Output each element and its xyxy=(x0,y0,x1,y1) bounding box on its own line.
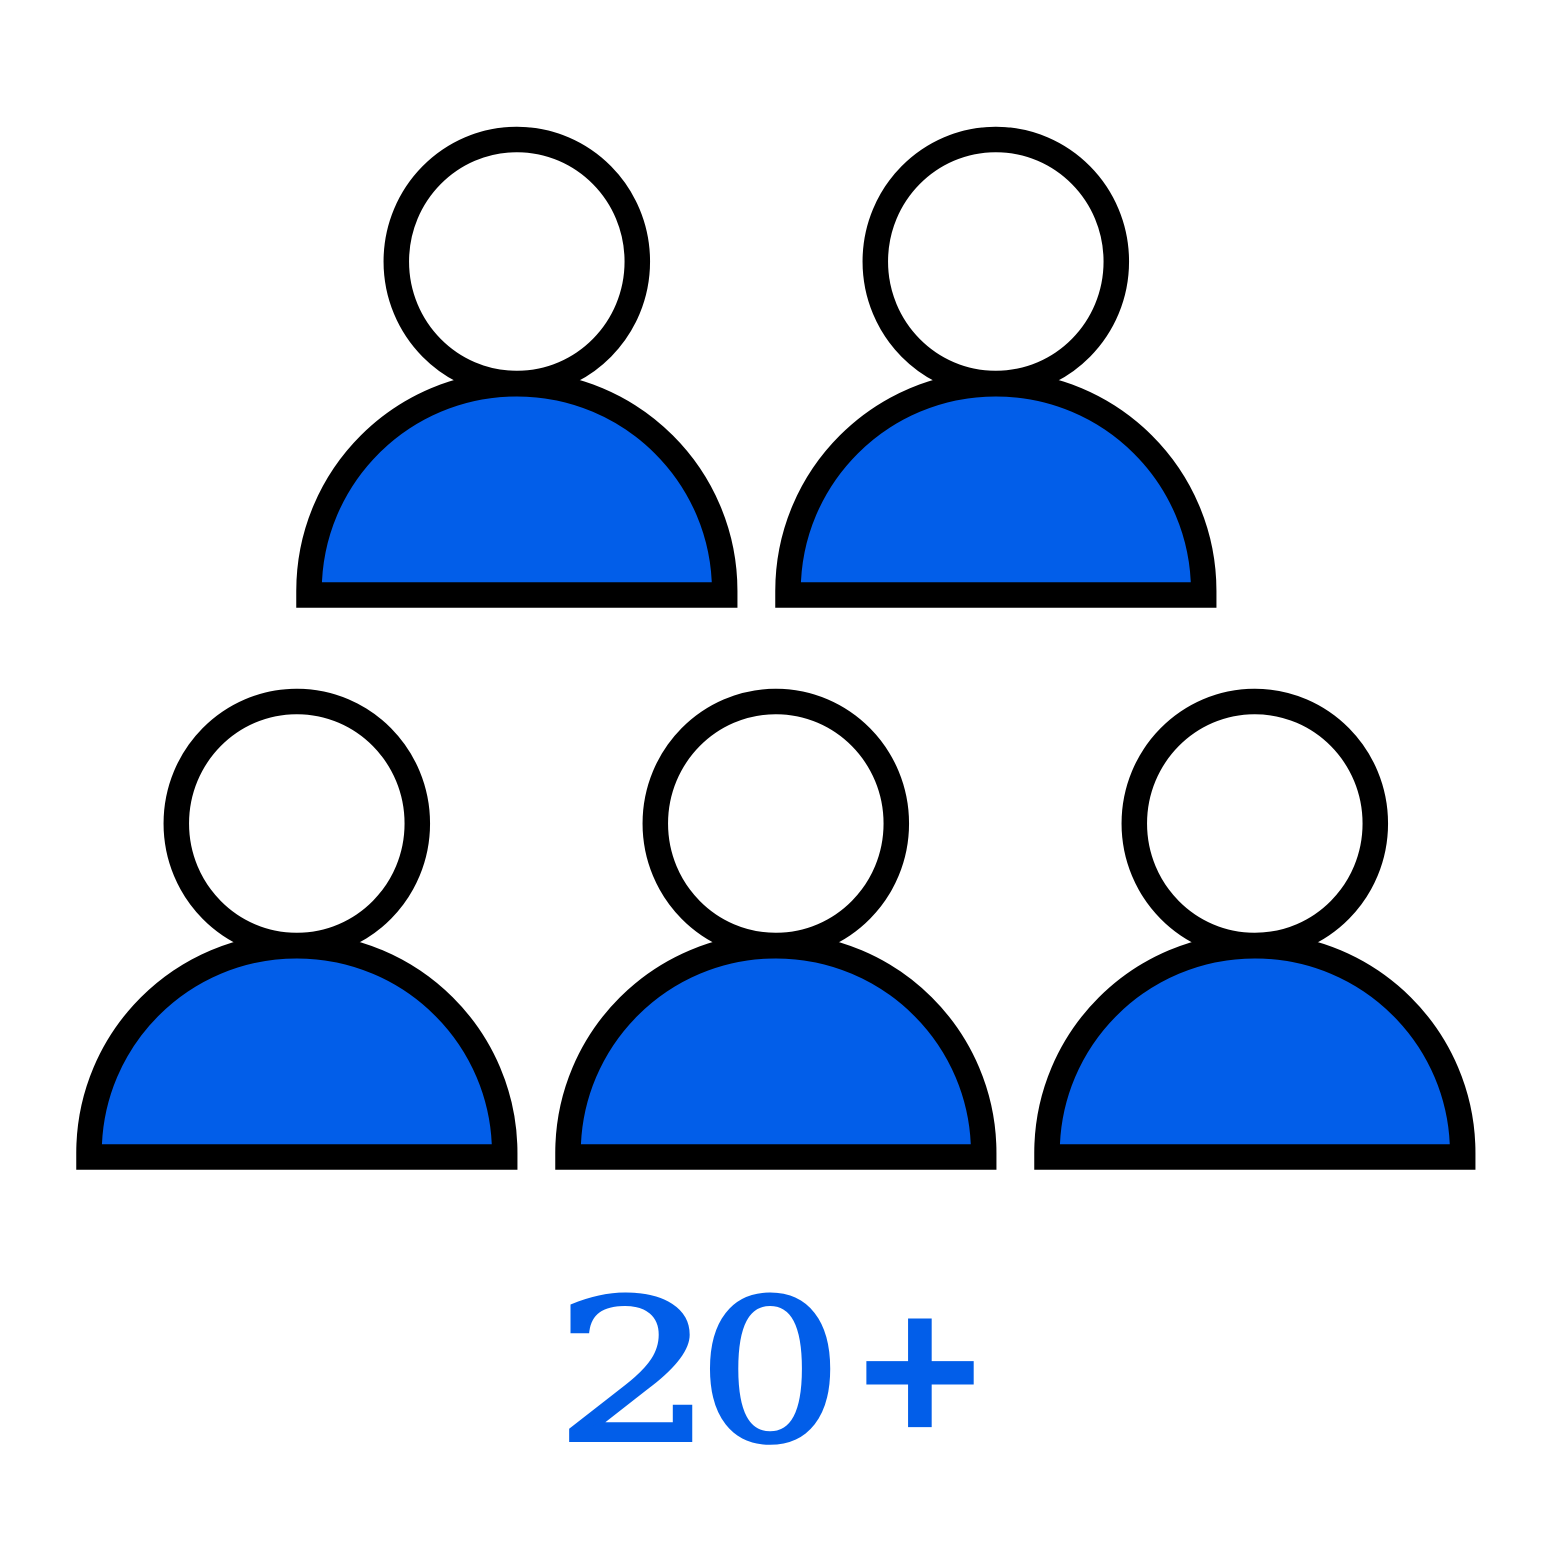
icon: person, bottom row middle xyxy=(568,702,984,1157)
count label: 20+: 2 xyxy=(555,1259,714,1487)
count label: 20+: + xyxy=(857,1251,982,1490)
icon: person, bottom row left xyxy=(89,702,505,1157)
count label: 20+: 0 xyxy=(697,1259,843,1487)
icon: person, bottom row right xyxy=(1047,702,1463,1157)
count label: 20+ xyxy=(555,1251,982,1490)
icon: person, top row right xyxy=(788,140,1204,595)
icon: person, top row left xyxy=(309,140,725,595)
